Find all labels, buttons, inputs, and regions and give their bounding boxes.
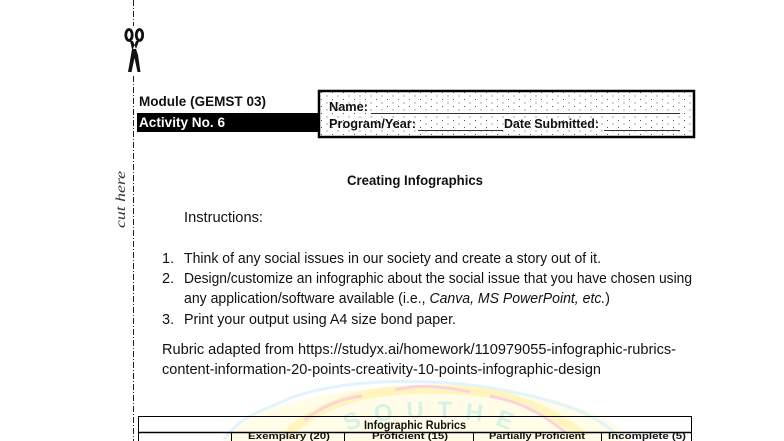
heading: instructions: Instructions: — [184, 210, 263, 226]
list: instructions — [162, 251, 692, 328]
list: instructions: 3. — [162, 312, 174, 328]
list: instructions: Think of any social issues in our society and create a story out of it. — [184, 251, 601, 267]
watermark: seal lettering: SOUTHE — [344, 402, 514, 430]
list: instructions: 2. — [162, 271, 174, 287]
column headers: Proficient (15) — [372, 431, 448, 441]
title: Creating Infographics — [347, 172, 483, 188]
list: instructions: any application/software available (i.e., Canva, MS PowerPoint, etc.) — [184, 291, 610, 307]
list: instructions: 1. — [162, 251, 174, 267]
list: instructions: Design/customize an infographic about the social issue that you have chosen using — [184, 271, 692, 287]
field: name: Name: — [329, 100, 368, 114]
bar: activity number: Activity No. 6 — [139, 114, 225, 130]
field: date submitted: Date Submitted: — [504, 117, 599, 131]
icon: scissors — [126, 30, 143, 72]
field: program and year: Program/Year: — [329, 117, 416, 131]
panel: student details form — [319, 91, 694, 137]
label: cut here: cut here — [114, 171, 129, 228]
table: infographic rubrics — [138, 416, 692, 441]
text: rubric source: Rubric adapted from https://studyx.ai/homework/110979055-infographic-rubrics- — [162, 342, 676, 358]
text: rubric source — [162, 342, 676, 378]
bar: activity number — [137, 113, 319, 132]
cut line — [132, 0, 134, 441]
column headers: Exemplary (20) — [248, 431, 330, 441]
heading: module: Module (GEMST 03) — [139, 93, 266, 109]
table title: Infographic Rubrics — [364, 418, 466, 432]
column headers: Partially Proficient — [489, 431, 585, 441]
text: rubric source: content-information-20-points-creativity-10-points-infographic-design — [162, 362, 601, 378]
list: instructions: Print your output using A4 size bond paper. — [184, 312, 456, 328]
column headers — [248, 431, 686, 441]
column headers: Incomplete (5) — [608, 431, 686, 441]
watermark: school seal — [224, 382, 631, 441]
